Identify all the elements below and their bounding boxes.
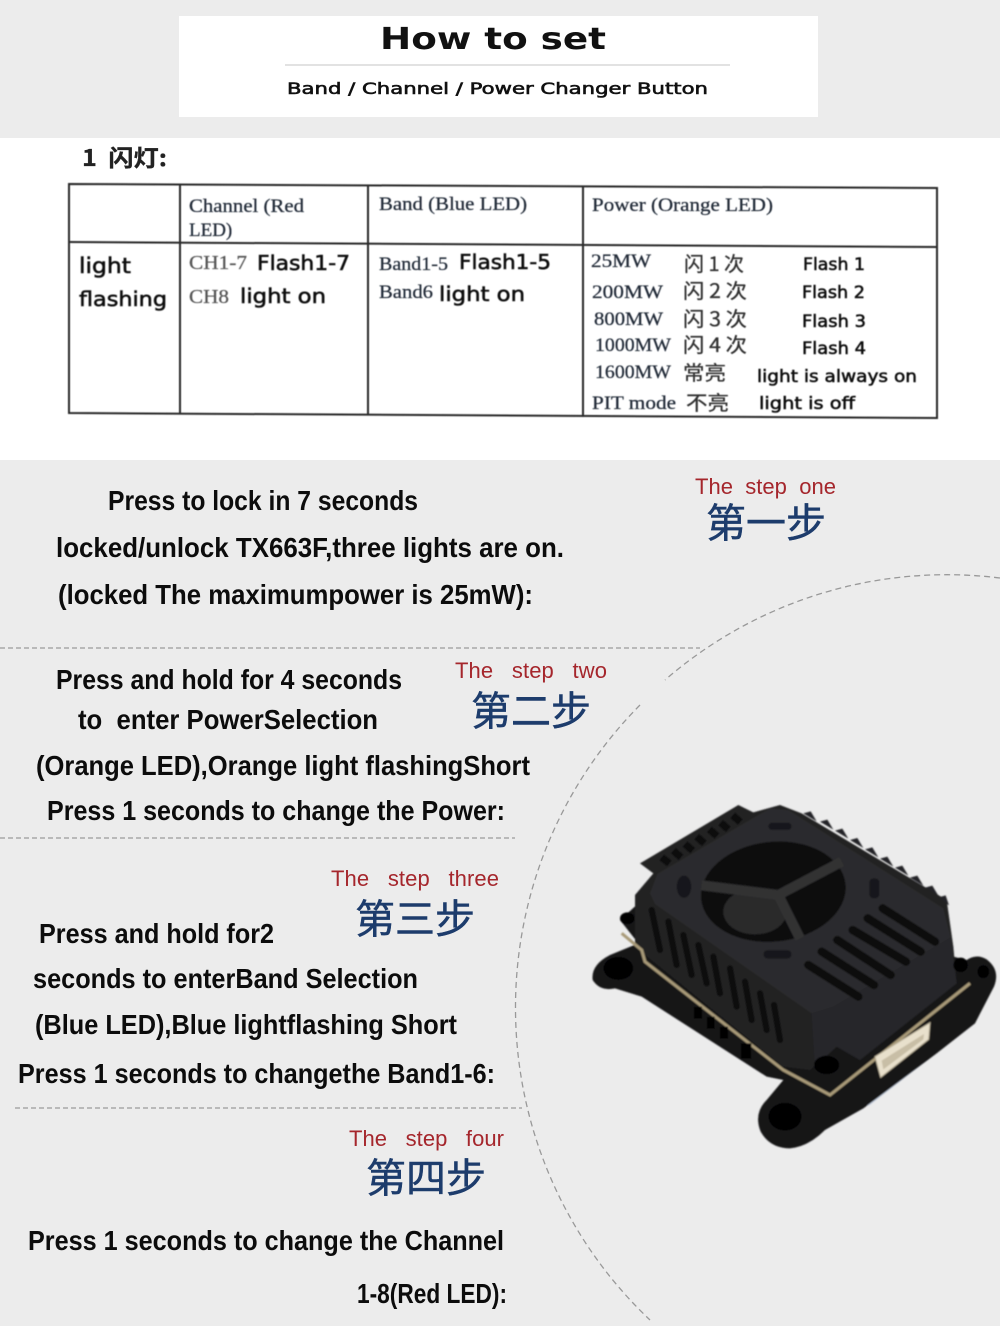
step one label: 第一步 [706,502,826,546]
step two label [455,658,607,734]
band cell: Flash1-5 [459,250,551,274]
fan opening [696,834,851,949]
channel cell: CH1-7 [189,252,247,274]
band cell [379,250,551,306]
product photo: video transmitter with fan [592,805,996,1148]
step three text: (Blue LED),Blue lightflashing Short [35,1009,457,1040]
power cell: PIT mode [592,393,676,414]
step three label [331,866,499,942]
step one text: locked/unlock TX663F,three lights are on. [56,532,564,563]
step two text: Press 1 seconds to change the Power: [47,795,505,826]
power cell: 闪 2 次 [683,275,747,304]
step three text: Press 1 seconds to changethe Band1-6: [18,1058,495,1089]
step two label: The step two [455,658,607,683]
dashed arc around product [515,575,1000,1320]
surface marks [677,823,879,959]
PCB edge [622,933,970,1095]
step three block [18,866,499,1089]
side ports [694,1007,751,1059]
channel cell: Flash1-7 [257,251,350,275]
power cell: 1000MW [595,335,671,356]
row label [79,254,167,311]
power cell: 800MW [594,309,663,330]
top surface [650,808,951,1013]
header cells: LED) [189,220,232,241]
step four text: 1-8(Red LED): [357,1278,507,1309]
title card [179,16,818,117]
step three text [18,918,495,1089]
top edge teeth [803,811,949,905]
power cell: 闪 1 次 [684,248,744,277]
step one label [695,474,836,546]
step two text: Press and hold for 4 seconds [56,664,402,695]
band cell: Band1-5 [379,254,448,275]
step two text: to enter PowerSelection [78,704,378,735]
front face [812,937,957,1067]
fan hub [723,889,787,934]
power cell: light is off [759,394,856,414]
step three label: The step three [331,866,499,891]
step two text: (Orange LED),Orange light flashingShort [36,750,530,781]
channel cell: light on [240,284,326,308]
step one block [56,474,836,610]
step three text: Press and hold for2 [39,918,274,949]
shadow under board [850,1027,958,1110]
step three label: 第三步 [355,898,475,942]
power cell [591,248,917,416]
channel cell [189,251,350,308]
white connector [875,1023,930,1077]
step one text: Press to lock in 7 seconds [108,485,418,516]
row label: flashing [79,287,167,311]
channel cell: CH8 [189,286,229,308]
power cell: 1600MW [595,362,671,383]
header cells: Channel (Red [189,196,305,217]
power cell: 不亮 [686,387,729,416]
power cell: Flash 4 [802,339,866,359]
step two label: 第二步 [471,690,591,734]
step four label [349,1126,504,1201]
step four text [28,1225,507,1309]
left fins [652,910,780,1040]
top shell [635,805,957,1070]
rear vent slots [662,815,740,863]
step two text [36,664,530,826]
step one label: The step one [695,474,836,499]
fan guard spokes [702,862,842,938]
subtitle: Band / Channel / Power Changer Button [287,79,708,98]
section heading: flashing lights: 1 闪灯: [82,139,167,173]
right vent slots [808,908,935,997]
step four block [28,1126,507,1309]
band cell: Band6 [379,282,433,303]
header cells [189,194,773,241]
header cells: Band (Blue LED) [379,194,527,215]
step four text: Press 1 seconds to change the Channel [28,1225,504,1256]
band cell: light on [439,282,525,306]
title: How to set [380,22,606,57]
power cell: Flash 1 [803,255,865,275]
power cell: 200MW [592,282,663,303]
base plate [592,880,996,1148]
row label: light [79,254,131,278]
power cell: 闪 4 次 [683,329,747,358]
step two block [36,658,607,826]
header cells: Power (Orange LED) [592,195,773,216]
power cell: 25MW [591,251,651,272]
step one text [56,485,564,610]
mounting holes and screws [603,912,989,1131]
power cell: light is always on [757,367,917,387]
step four label: The step four [349,1126,504,1151]
power cell: Flash 2 [802,283,865,303]
power cell: Flash 3 [802,312,866,332]
power cell: 闪 3 次 [683,303,747,332]
LED table [69,184,937,418]
power cell: 常亮 [683,357,726,386]
step four label: 第四步 [366,1157,486,1201]
step three text: seconds to enterBand Selection [33,963,418,994]
step one text: (locked The maximumpower is 25mW): [58,579,533,610]
